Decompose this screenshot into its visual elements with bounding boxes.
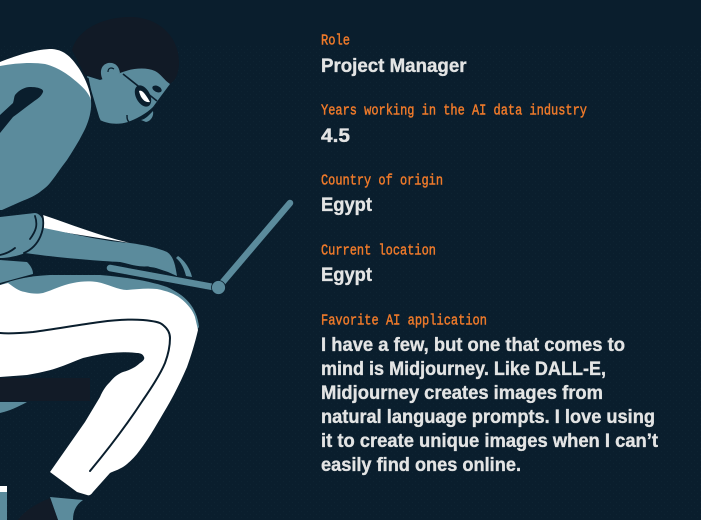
shoe shadow [18, 498, 58, 520]
field: favorite application: natural language prompts. I love using [321, 407, 655, 428]
field: location [321, 242, 436, 286]
trousers [0, 281, 198, 495]
trouser fold line [0, 320, 170, 471]
field: favorite application: Favorite AI application [321, 312, 487, 330]
field: location: Egypt [321, 265, 373, 286]
field: favorite application: easily find ones online. [321, 455, 521, 476]
field: role: Project Manager [321, 56, 467, 77]
field: favorite application [321, 312, 659, 476]
field: years [321, 102, 587, 147]
white strip under arm [43, 215, 130, 243]
white shoulder [0, 49, 91, 100]
glasses line [123, 74, 157, 101]
stool leg [0, 486, 7, 520]
torso [0, 63, 91, 210]
sleeve and upper arm [0, 213, 177, 276]
fingers [147, 256, 192, 277]
field: country: Country of origin [321, 172, 443, 190]
mouth [141, 111, 153, 122]
eye [131, 83, 155, 109]
eyebrow [151, 84, 163, 94]
laptop [110, 203, 290, 294]
hair [72, 17, 179, 84]
shoe [50, 497, 83, 520]
neck and face [87, 69, 170, 124]
neck line [88, 78, 100, 120]
field: years: Years working in the AI data industry [321, 102, 587, 120]
field: location: Current location [321, 242, 436, 260]
field: favorite application: I have a few, but one that comes to [321, 335, 625, 356]
field: favorite application: mind is Midjourney. Like DALL-E, [321, 359, 606, 380]
lower thigh patch [0, 260, 33, 283]
ear detail [108, 68, 114, 72]
seat underside [0, 402, 27, 413]
seat [0, 378, 90, 401]
arm crease [0, 87, 43, 133]
illustration: person on laptop [0, 17, 290, 520]
hip band [0, 275, 199, 340]
smile crease [127, 115, 129, 122]
field: country [321, 172, 443, 216]
field: favorite application: it to create unique images when I can’t [321, 431, 659, 452]
field: years: 4.5 [321, 126, 350, 147]
field: role [321, 32, 467, 77]
field: favorite application: Midjourney creates images from [321, 383, 603, 404]
field: country: Egypt [321, 195, 373, 216]
field: role: Role [321, 32, 350, 50]
sleeve fold [0, 214, 43, 255]
ear [101, 63, 120, 82]
